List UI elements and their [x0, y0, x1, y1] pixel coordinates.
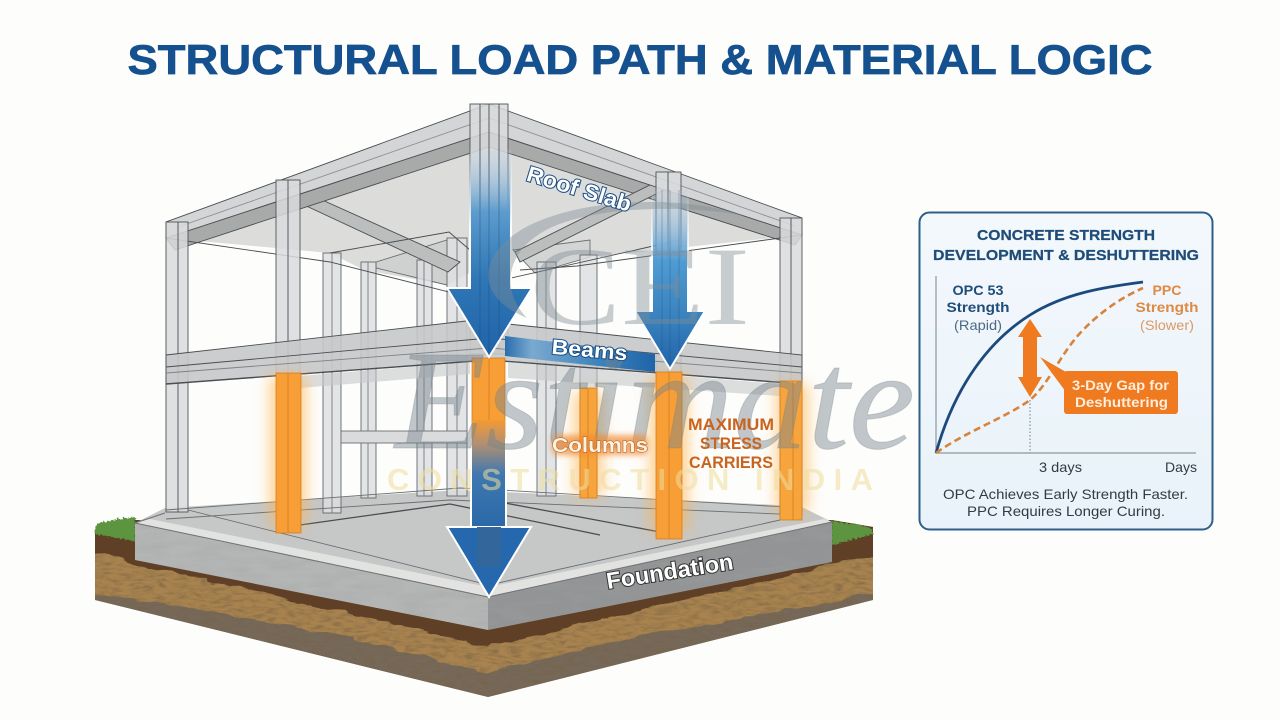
- column far left: [276, 373, 301, 533]
- beam load highlight: [505, 336, 655, 372]
- label: Columns: Columns: [552, 435, 648, 457]
- corner columns: [166, 104, 802, 512]
- watermark: Estimate: Estimate: [393, 321, 915, 479]
- label: Maximum stress carriers: CARRIERS: [689, 454, 773, 472]
- label: Roof Slab: Roof Slab: [524, 161, 634, 217]
- column front right: [656, 372, 682, 539]
- panel takeaway: PPC Requires Longer Curing.: [967, 503, 1165, 519]
- grass left: [95, 517, 135, 541]
- column center upper: [472, 358, 505, 438]
- PPC curve: [936, 288, 1143, 453]
- callout: 3-day gap: [1040, 357, 1178, 414]
- back layered soffit: [376, 240, 447, 285]
- OPC label: Strength: [946, 299, 1010, 315]
- panel heading: CONCRETE STRENGTH: [977, 227, 1155, 244]
- orange columns: [276, 358, 802, 539]
- title: STRUCTURAL LOAD PATH & MATERIAL LOGIC: [128, 36, 1152, 83]
- watermark: Construction India: CONSTRUCTION INDIA: [387, 462, 873, 497]
- foundation slab: [135, 490, 832, 630]
- lower right columns: [780, 384, 802, 514]
- gap double arrow: [1018, 319, 1042, 397]
- column inner right: [580, 388, 597, 498]
- load arrow: columns to foundation: [447, 420, 531, 597]
- soil: dark topsoil: [80, 515, 890, 646]
- panel takeaway: OPC Achieves Early Strength Faster.: [943, 486, 1188, 502]
- panel takeaway: [943, 486, 1188, 519]
- foundation: right face: [488, 522, 832, 630]
- PPC label: Strength: [1136, 299, 1198, 315]
- callout: 3-day gap: 3-Day Gap for: [1072, 377, 1170, 393]
- panel heading: DEVELOPMENT & DESHUTTERING: [933, 247, 1199, 264]
- panel heading: [933, 227, 1199, 264]
- 3-day dotted guide: [1029, 400, 1031, 453]
- axis labels: 3 days: [1039, 459, 1082, 475]
- ground and soil block: [94, 516, 874, 697]
- load arrow: roof to columns: [447, 150, 532, 357]
- label: Maximum stress carriers: MAXIMUM: [688, 416, 774, 434]
- label: Maximum stress carriers: [688, 416, 774, 472]
- roof top band: [166, 104, 802, 238]
- grass right: [832, 521, 873, 545]
- OPC 53 curve: [936, 282, 1143, 453]
- ground floor beam lines: [166, 488, 802, 510]
- foundation: top surface: [135, 490, 832, 597]
- swoosh C: [488, 202, 745, 318]
- panel background: [920, 212, 1212, 530]
- soil: tan layer: [95, 553, 873, 674]
- PPC label: (Slower): [1140, 317, 1194, 333]
- soil: grey bottom layer: [95, 594, 873, 697]
- column far right: [780, 381, 802, 520]
- OPC label: (Rapid): [954, 317, 1002, 333]
- OPC label: OPC 53: [952, 282, 1004, 298]
- PPC label: [1136, 282, 1198, 333]
- label: Foundation: Foundation: [605, 548, 735, 594]
- label: Beams: Beams: [551, 336, 628, 365]
- OPC label: [946, 282, 1010, 333]
- panel: concrete strength chart: [920, 212, 1212, 530]
- watermark: CEI logo: [488, 202, 750, 349]
- callout: 3-day gap: Deshuttering: [1075, 394, 1168, 410]
- orange column glow: [270, 376, 808, 531]
- middle floor slab: [166, 320, 802, 384]
- label: Maximum stress carriers: STRESS: [700, 435, 762, 453]
- PPC label: PPC: [1152, 282, 1182, 298]
- roof underside: [166, 132, 802, 285]
- foundation: left face: [135, 523, 488, 630]
- CEI letters: CEI: [530, 225, 750, 349]
- interior tie beam: [341, 431, 467, 443]
- roof inner beams: [287, 190, 460, 272]
- back columns: [323, 238, 597, 513]
- soil: base: [95, 522, 873, 697]
- axis labels: Days: [1165, 459, 1197, 475]
- building frame: [166, 104, 802, 585]
- back column center lines: [332, 238, 546, 513]
- axis labels: [1039, 459, 1197, 475]
- chart axes: [936, 276, 1196, 453]
- load arrow: right side: [635, 190, 705, 369]
